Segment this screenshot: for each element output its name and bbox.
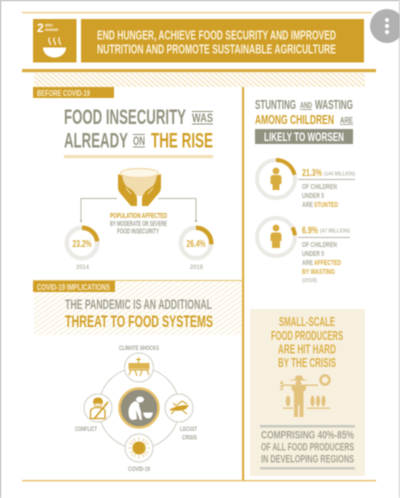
SDG 2 badge: ZERO	[45, 24, 53, 28]
headline: pandemic threat	[65, 297, 213, 331]
panel heading: SMALL-SCALE	[279, 315, 335, 329]
stat: 6.9% wasting: (47 MILLION)	[320, 228, 350, 234]
headline: stunting and wasting: AND	[300, 101, 312, 110]
text: population affected: FOOD INSECURITY	[117, 226, 159, 236]
headline: stunting and wasting	[255, 98, 354, 127]
stat: 21.3% stunted: ARE	[302, 200, 313, 209]
text: population affected	[110, 211, 167, 236]
label: conflict: CONFLICT	[75, 426, 97, 433]
headline: food insecurity	[64, 106, 213, 152]
section tag: covid-19 implications	[33, 281, 115, 292]
stat: 6.9% wasting: UNDER 5	[302, 249, 324, 258]
goal title banner	[81, 19, 364, 62]
section tag: covid-19 implications: COVID-19 IMPLICATIONS	[37, 282, 110, 292]
label: climate shocks: CLIMATE SHOCKS	[119, 345, 159, 352]
panel statistic text	[261, 430, 354, 466]
donut: stunted children	[257, 160, 295, 198]
donut chart: 2018	[181, 228, 211, 271]
node: locust crisis	[165, 394, 193, 422]
panel statistic text: COMPRISING 40%-85%	[261, 430, 354, 442]
stat: 6.9% wasting: OF CHILDREN	[302, 240, 337, 249]
label: covid-19: COVID-19	[128, 466, 150, 473]
stat: 6.9% wasting: BY WASTING	[302, 267, 335, 276]
headline: stunting and wasting: ARE	[340, 116, 354, 125]
donut chart: 2014	[67, 228, 97, 271]
donut: wasting children	[250, 211, 302, 263]
donut chart: 2014: 23.2%	[72, 239, 92, 250]
label: locust crisis	[180, 426, 197, 442]
donut chart: 2018: 2018	[190, 264, 203, 271]
headline: food insecurity: THE RISE	[151, 130, 213, 152]
node: climate shocks	[124, 353, 154, 382]
panel statistic text: IN DEVELOPING REGIONS	[261, 454, 354, 466]
threats diagram	[84, 353, 193, 462]
headline: food insecurity: ALREADY	[64, 130, 128, 152]
node: conflict	[84, 394, 112, 422]
text: population affected: BY MODERATE OR SEVERE	[110, 219, 167, 228]
stat: 6.9% wasting: (2018)	[302, 278, 317, 284]
menu button	[370, 9, 400, 43]
label: locust crisis: CRISIS	[182, 434, 197, 442]
stat: 6.9% wasting: 6.9%	[302, 226, 318, 236]
panel heading	[271, 315, 343, 370]
panel heading: ARE HIT HARD	[278, 342, 336, 356]
stat: 21.3% stunted	[298, 168, 355, 209]
icon: farmer with wheat and sun	[280, 376, 330, 417]
icon: hands holding bowl	[118, 168, 161, 206]
stat: 6.9% wasting: ARE	[302, 258, 313, 267]
panel: small-scale food producers	[250, 309, 365, 476]
stat: 21.3% stunted: OF CHILDREN	[302, 182, 337, 191]
stat: 21.3% stunted: (144 MILLION)	[324, 172, 355, 178]
SDG 2 badge	[33, 19, 76, 62]
headline: stunting and wasting: AMONG CHILDREN	[255, 113, 334, 127]
label: locust crisis: LOCUST	[180, 426, 197, 433]
banner: likely to worsen: LIKELY TO WORSEN	[264, 130, 344, 144]
headline: food insecurity: FOOD INSECURITY	[64, 106, 186, 129]
centre icon: person with bowl	[120, 388, 158, 428]
donut chart: 2014: 2014	[76, 264, 89, 271]
section tag: before covid-19: BEFORE COVID-19	[37, 88, 90, 98]
donut chart: 2018: 26.4%	[186, 239, 206, 250]
headline: stunting and wasting: WASTING	[315, 98, 353, 112]
headline: pandemic threat: THE PANDEMIC IS AN ADDITIONAL	[65, 297, 212, 312]
stat: 6.9% wasting: AFFECTED	[314, 258, 341, 267]
banner: likely to worsen	[255, 129, 353, 144]
SDG 2 badge: 2	[37, 21, 44, 35]
stat: 21.3% stunted: STUNTED	[314, 200, 338, 209]
stat: 6.9% wasting	[298, 226, 350, 284]
SDG 2 badge: HUNGER	[45, 28, 58, 32]
text: population affected: POPULATION AFFECTED	[110, 211, 167, 220]
stat: 21.3% stunted: 21.3%	[302, 168, 322, 179]
headline: food insecurity: ON	[133, 134, 145, 148]
headline: stunting and wasting: STUNTING	[255, 98, 296, 112]
node: covid-19	[125, 434, 153, 462]
headline: food insecurity: WAS	[192, 111, 213, 125]
headline: pandemic threat: THREAT TO FOOD SYSTEMS	[65, 312, 213, 331]
panel heading: FOOD PRODUCERS	[271, 329, 343, 343]
connector lines	[80, 198, 197, 222]
panel heading: BY THE CRISIS	[278, 356, 336, 370]
stat: 21.3% stunted: UNDER 5	[302, 191, 324, 200]
